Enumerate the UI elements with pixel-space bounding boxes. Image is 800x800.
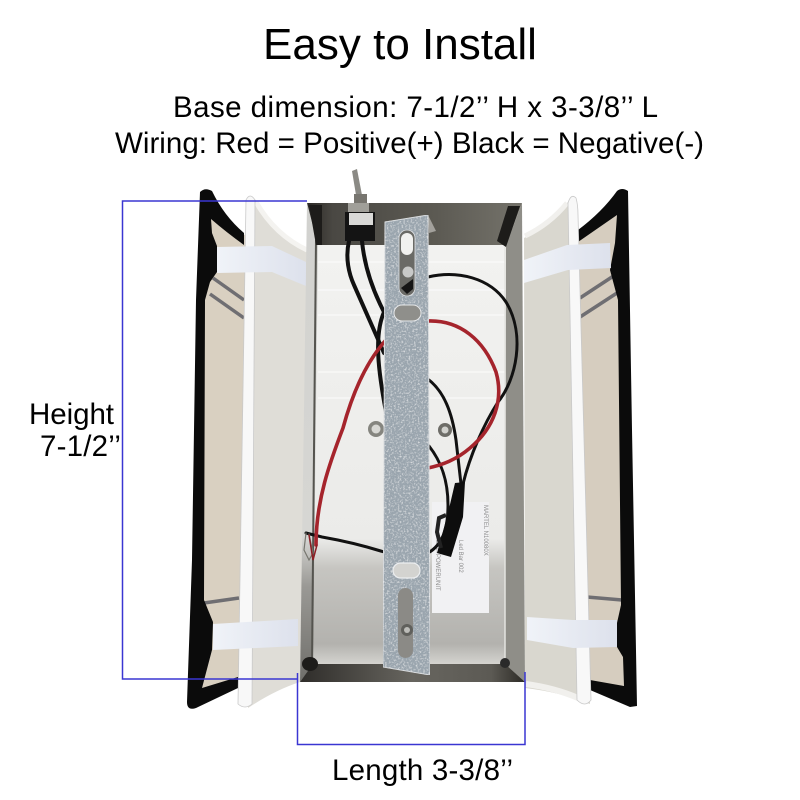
- left shade curved top edge: [256, 202, 307, 250]
- toggle switch: [345, 169, 375, 241]
- bracket plate: [383, 215, 430, 675]
- right shade lower edge: [526, 684, 578, 698]
- height label: Height: [29, 398, 114, 431]
- base dimension text: Base dimension: 7-1/2’’ H x 3-3/8’’ L: [173, 91, 658, 124]
- switch nut: [354, 194, 367, 203]
- switch wire A: [347, 241, 384, 353]
- switch lever: [352, 169, 362, 195]
- left top clip: [217, 246, 306, 286]
- ground wire: [306, 533, 384, 552]
- floor streaks: [318, 262, 505, 398]
- looped black wire: [428, 275, 517, 484]
- lower black wire: [428, 446, 448, 553]
- left shade assembly: [187, 189, 307, 709]
- black wires behind bracket: [304, 241, 517, 560]
- switch collar: [348, 203, 369, 212]
- right bottom clip: [527, 617, 617, 648]
- left shade grey stripes: [204, 278, 244, 603]
- product label sticker: Led Bar 002: [457, 540, 463, 573]
- switch wire B: [362, 241, 386, 412]
- length dimension bracket: [298, 672, 525, 744]
- height label: [29, 398, 121, 463]
- left shade beige outer panel: [200, 215, 245, 690]
- metal mounting bracket: [383, 215, 436, 675]
- red wires: [309, 321, 499, 560]
- red wire left: [316, 340, 386, 545]
- left bottom clip: [213, 619, 298, 650]
- left shade white inner panel: [248, 198, 307, 708]
- product label sticker: [432, 502, 489, 613]
- right shade curved top edge: [525, 203, 567, 236]
- right top clip: [524, 243, 611, 283]
- box bottom wall: [300, 664, 525, 682]
- metal base box: [300, 203, 525, 682]
- product label sticker: MARTEL N10080X: [482, 505, 488, 556]
- wire connector: [437, 482, 465, 557]
- right shade beige outer panel: [578, 205, 624, 686]
- title: Easy to Install: [263, 20, 537, 69]
- switch body: [345, 212, 375, 241]
- height label: 7-1/2’’: [40, 430, 121, 463]
- product label sticker: E327POWERUNIT: [434, 540, 440, 591]
- box top wall: [307, 203, 522, 245]
- box right wall: [505, 203, 525, 682]
- left white rod: [238, 196, 255, 707]
- length label: Length 3-3/8’’: [332, 754, 513, 787]
- bracket upper short slot: [394, 305, 421, 321]
- box floor: [312, 244, 506, 665]
- wiring text: Wiring: Red = Positive(+) Black = Negative(-): [115, 127, 704, 160]
- red wire right loop: [428, 321, 499, 468]
- bracket lower long slot: [398, 588, 413, 658]
- right shade black frame: [578, 189, 637, 707]
- corner shadows: [309, 205, 322, 245]
- left shade black frame: [187, 189, 244, 709]
- right shade grey stripes: [580, 275, 622, 600]
- bracket upper long slot: [399, 230, 415, 296]
- mounting screws on floor: [368, 421, 452, 437]
- right white rod: [568, 196, 591, 704]
- bracket lower short slot: [393, 563, 420, 578]
- right shade assembly: [524, 189, 637, 707]
- inner black wire: [429, 380, 461, 484]
- bracket tab: [428, 215, 436, 233]
- height dimension bracket: [122, 201, 307, 679]
- switch label: [349, 213, 373, 225]
- box left wall: [300, 203, 318, 682]
- right shade white inner panel: [524, 198, 590, 704]
